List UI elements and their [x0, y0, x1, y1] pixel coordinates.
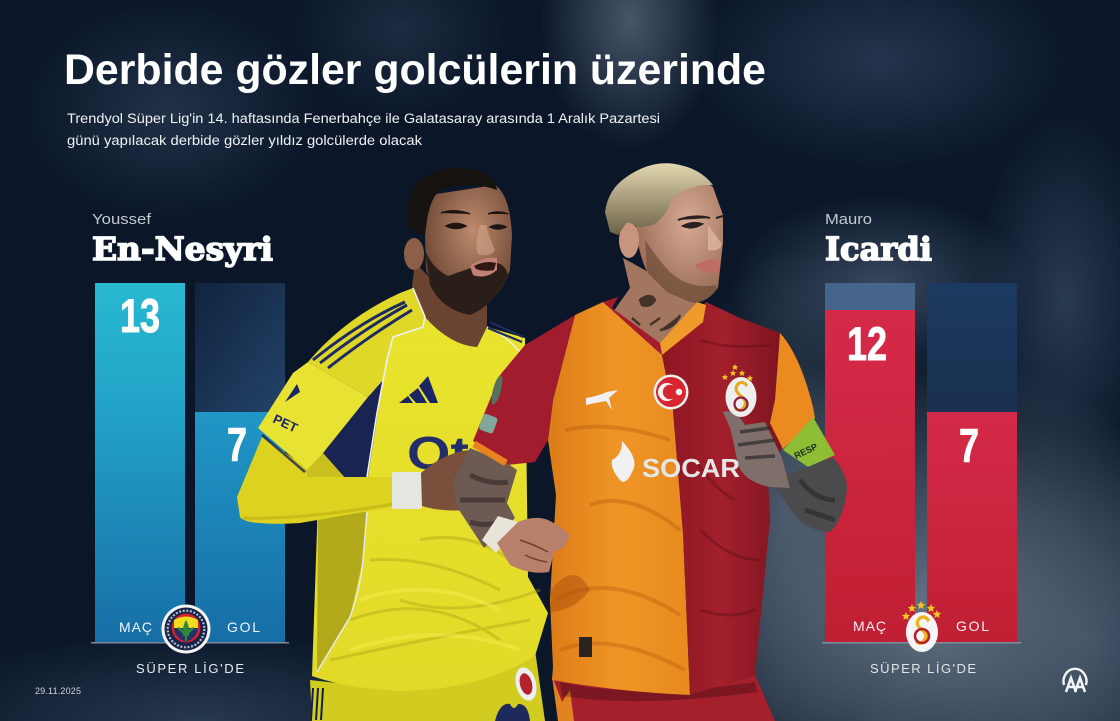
player: Mauro Icardi: RESP — [793, 441, 819, 461]
neck — [613, 258, 697, 345]
beard — [425, 250, 508, 315]
shoulder sleeve — [308, 288, 425, 397]
hand — [421, 450, 470, 510]
underarm patch — [296, 450, 350, 482]
torso orange half — [548, 302, 690, 695]
bar: 7 gol: GOL — [956, 618, 989, 634]
icon: Galatasaray badge — [902, 601, 941, 652]
shirt label — [579, 637, 592, 657]
ear — [404, 238, 424, 270]
bar: 7 gol — [927, 283, 1017, 642]
sleeve hem — [474, 444, 506, 463]
date: 29.11.2025 — [35, 686, 81, 696]
bar: 7 gol — [195, 283, 285, 642]
eyes and brows — [678, 216, 723, 228]
puma logo — [586, 390, 618, 410]
socar logo — [612, 441, 740, 483]
mouth — [695, 260, 719, 273]
first name: Mauro: Mauro — [825, 212, 872, 228]
subtitle: günü yapılacak derbide gözler yıldız golcülerde olacak — [67, 133, 422, 148]
bar: 12 maç: MAÇ — [853, 618, 886, 634]
flag badge — [654, 374, 688, 410]
collar piping — [367, 288, 425, 477]
shadow under arm — [317, 512, 367, 672]
bar: 13 maç: MAÇ — [119, 619, 152, 635]
orange folds — [555, 427, 685, 670]
icon: Fenerbahçe badge — [162, 604, 210, 654]
title: Derbide gözler golcülerin üzerinde — [64, 46, 766, 94]
bar: 12 maç: 12 — [847, 317, 887, 370]
logo: Anadolu Agency — [1063, 669, 1087, 692]
caption: Süper Lig'de: SÜPER LİG'DE — [136, 661, 244, 676]
bar: 7 gol: 7 — [227, 418, 247, 471]
shorts — [552, 675, 775, 721]
player: Youssef En-Nesyri — [237, 168, 548, 721]
shorts badge — [512, 665, 540, 703]
bar: 7 gol: 7 — [959, 419, 979, 472]
torso red half — [662, 302, 782, 695]
ear — [619, 222, 639, 258]
bar: 13 maç: 13 — [120, 289, 160, 342]
bar: 13 maç — [95, 283, 185, 642]
right forearm — [770, 457, 847, 532]
right hand — [723, 411, 790, 488]
mouth — [470, 258, 497, 277]
wrist band — [392, 472, 422, 509]
collar — [603, 297, 662, 355]
sleeve badges — [489, 374, 505, 406]
hair — [407, 168, 497, 235]
panel: Icardi stats — [822, 212, 1021, 676]
crest badge — [722, 364, 756, 417]
surname: Icardi: Icardi — [825, 230, 932, 268]
first name: Youssef: Youssef — [92, 212, 152, 228]
eyes and brows — [441, 211, 508, 229]
head — [636, 178, 723, 302]
neck tattoos — [632, 296, 690, 335]
jersey sponsor: Ot — [407, 427, 469, 479]
red folds — [695, 340, 770, 615]
shoulder stripes — [313, 302, 412, 368]
captain armband — [783, 417, 835, 467]
baseline — [91, 642, 289, 644]
sleeve cap — [258, 362, 368, 470]
socar logo: SOCAR — [642, 453, 740, 483]
bar: 7 gol: GOL — [227, 619, 260, 635]
nose — [708, 225, 722, 250]
torso — [312, 288, 548, 691]
left forearm — [453, 448, 517, 548]
shorts — [310, 650, 545, 721]
left hand — [497, 518, 570, 573]
right sleeve orange — [770, 333, 815, 449]
side piping — [317, 512, 367, 672]
player: Mauro Icardi — [453, 163, 847, 721]
adidas logo — [399, 376, 438, 403]
caption: Süper Lig'de: SÜPER LİG'DE — [870, 661, 976, 676]
head — [425, 185, 512, 315]
left sleeve — [473, 315, 575, 465]
nose — [476, 225, 495, 255]
jersey folds — [330, 538, 540, 660]
shorts shadow — [560, 682, 757, 701]
hair — [605, 163, 713, 235]
neck — [412, 262, 487, 347]
subtitle — [67, 111, 660, 148]
surname: En-Nesyri: En-Nesyri — [92, 230, 273, 268]
baseline — [822, 642, 1021, 644]
dark side panel — [323, 380, 383, 480]
subtitle: Trendyol Süper Lig'in 14. haftasında Fenerbahçe ile Galatasaray arasında 1 Aralık Pazartesi — [67, 111, 660, 126]
wrist band — [482, 516, 518, 553]
stubble — [645, 240, 718, 302]
panel: En-Nesyri stats — [91, 212, 289, 676]
bar: 12 maç — [825, 283, 915, 642]
long sleeve — [237, 437, 393, 524]
sleeve sponsor: PET — [271, 411, 300, 435]
